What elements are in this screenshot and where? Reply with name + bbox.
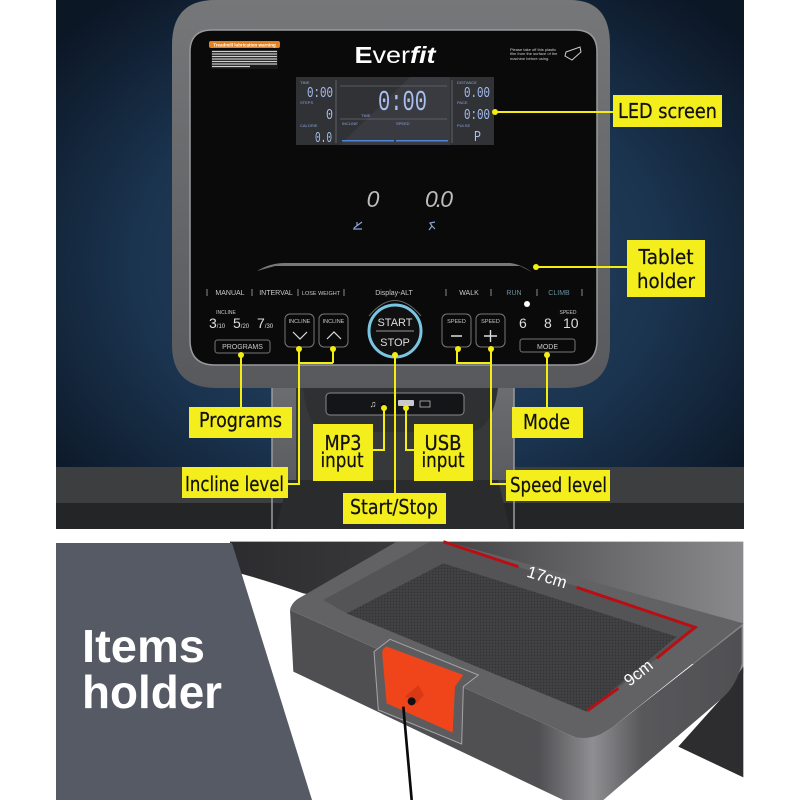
label: USB input: USB [424, 431, 462, 455]
label: Incline level: Incline level [185, 472, 284, 496]
LCD screen: CALORIE [300, 123, 318, 128]
label: Incline level [182, 467, 288, 498]
red dimension lines [443, 542, 695, 711]
label: Mode: Mode [523, 410, 570, 434]
port housing [303, 388, 498, 432]
incline buttons [285, 314, 348, 347]
speed presets: 8 [544, 315, 552, 331]
heading: Items holder [82, 620, 222, 718]
LCD screen: STEPS [300, 100, 313, 105]
mode labels: Display-ALT [375, 290, 414, 297]
LCD screen: 0:00 [307, 85, 333, 102]
brand logo: Everfit [354, 42, 437, 68]
LCD screen: TIME [361, 113, 371, 118]
heading: Items holder: Items [82, 620, 205, 672]
program presets: INCLINE [216, 310, 237, 316]
port housing: ♫ [370, 399, 376, 409]
speed buttons [442, 314, 505, 347]
label: Speed level [506, 470, 610, 501]
label: Tablet holder [627, 240, 705, 297]
LCD screen: 0:00 [378, 86, 427, 119]
incline buttons: INCLINE [289, 319, 311, 325]
tray front face [290, 610, 742, 800]
dimension 17cm: 17cm [525, 562, 569, 592]
program presets [209, 310, 274, 353]
icon: runner [429, 222, 435, 230]
program presets: PROGRAMS [222, 344, 263, 351]
start stop button [369, 300, 421, 357]
incline and speed readouts: 0.0 [425, 186, 453, 212]
label: Programs: Programs [199, 408, 282, 432]
plastic film note: Please take off this plastic [510, 47, 556, 52]
mode labels: CLIMB [548, 290, 570, 297]
icon: incline [353, 222, 362, 229]
label: Start/Stop [343, 493, 446, 524]
incline buttons: INCLINE [323, 319, 345, 325]
speed presets [519, 301, 579, 352]
speed buttons: SPEED [447, 319, 466, 325]
LCD screen: INCLINE [342, 121, 358, 126]
mode labels: MANUAL [215, 290, 245, 297]
label: LED screen [613, 95, 722, 127]
warning sticker: Treadmill lubrication warning [213, 42, 276, 48]
speed presets: SPEED [560, 310, 577, 316]
label: USB input: input [422, 448, 465, 472]
label: Programs [189, 407, 292, 438]
label: Tablet holder: holder [637, 269, 696, 293]
LCD screen: 0.00 [464, 85, 490, 102]
start stop button: START [377, 317, 413, 329]
console neck [272, 380, 514, 529]
label: Tablet holder: Tablet [638, 245, 694, 269]
panel: items holder photo [56, 542, 744, 800]
tray floor [347, 563, 677, 712]
tray rim [290, 542, 743, 738]
mode labels: WALK [459, 290, 479, 297]
speed presets: 6 [519, 315, 527, 331]
mode labels [207, 289, 582, 297]
LCD screen: PACE [457, 100, 468, 105]
mode labels: LOSE WEIGHT [302, 291, 341, 297]
label: MP3 input [313, 424, 373, 481]
program presets: 7/30 [257, 315, 274, 331]
LCD screen: PULSE [457, 123, 470, 128]
start stop button: STOP [380, 337, 410, 349]
incline and speed readouts [367, 186, 453, 212]
speed buttons: SPEED [481, 319, 500, 325]
dimension 9cm: 9cm [620, 656, 657, 690]
plastic film note: film from the surface of the [510, 51, 558, 56]
left title panel [56, 543, 312, 800]
incline and speed readouts: 0 [367, 186, 380, 212]
plastic film note: machine before using. [510, 56, 549, 61]
handlebars [56, 467, 744, 529]
plastic film note [510, 47, 581, 61]
tray cavity [323, 542, 698, 712]
program presets: 5/20 [233, 315, 250, 331]
mode labels: INTERVAL [259, 290, 293, 297]
warning sticker [209, 41, 280, 69]
label: LED screen: LED screen [618, 99, 717, 123]
panel: console photo [56, 0, 744, 529]
label: Mode [512, 407, 583, 438]
mode labels: RUN [506, 290, 522, 297]
leader lines [238, 109, 627, 493]
LCD screen: SPEED [396, 121, 410, 126]
LCD screen: 0.0 [315, 130, 332, 147]
label: Start/Stop: Start/Stop [350, 495, 438, 519]
orange tab [374, 639, 478, 800]
speed presets: MODE [537, 344, 558, 351]
label: Speed level: Speed level [510, 473, 607, 497]
LCD screen: TIME [300, 80, 310, 85]
tablet holder ledge [257, 263, 532, 272]
black control panel [190, 30, 597, 365]
LCD screen: 0:00 [464, 107, 490, 124]
console frame [172, 0, 610, 388]
label: MP3 input: input [320, 448, 364, 472]
label: MP3 input: MP3 [324, 431, 362, 455]
LCD screen: 0 [326, 107, 333, 124]
label: USB input [414, 424, 473, 481]
LCD screen [296, 77, 494, 147]
heading: Items holder: holder [82, 666, 222, 718]
LCD screen: DISTANCE [457, 80, 477, 85]
LCD screen: P [474, 129, 481, 146]
tray drawing [230, 542, 743, 800]
program presets: 3/10 [209, 315, 226, 331]
speed presets: 10 [563, 315, 579, 331]
